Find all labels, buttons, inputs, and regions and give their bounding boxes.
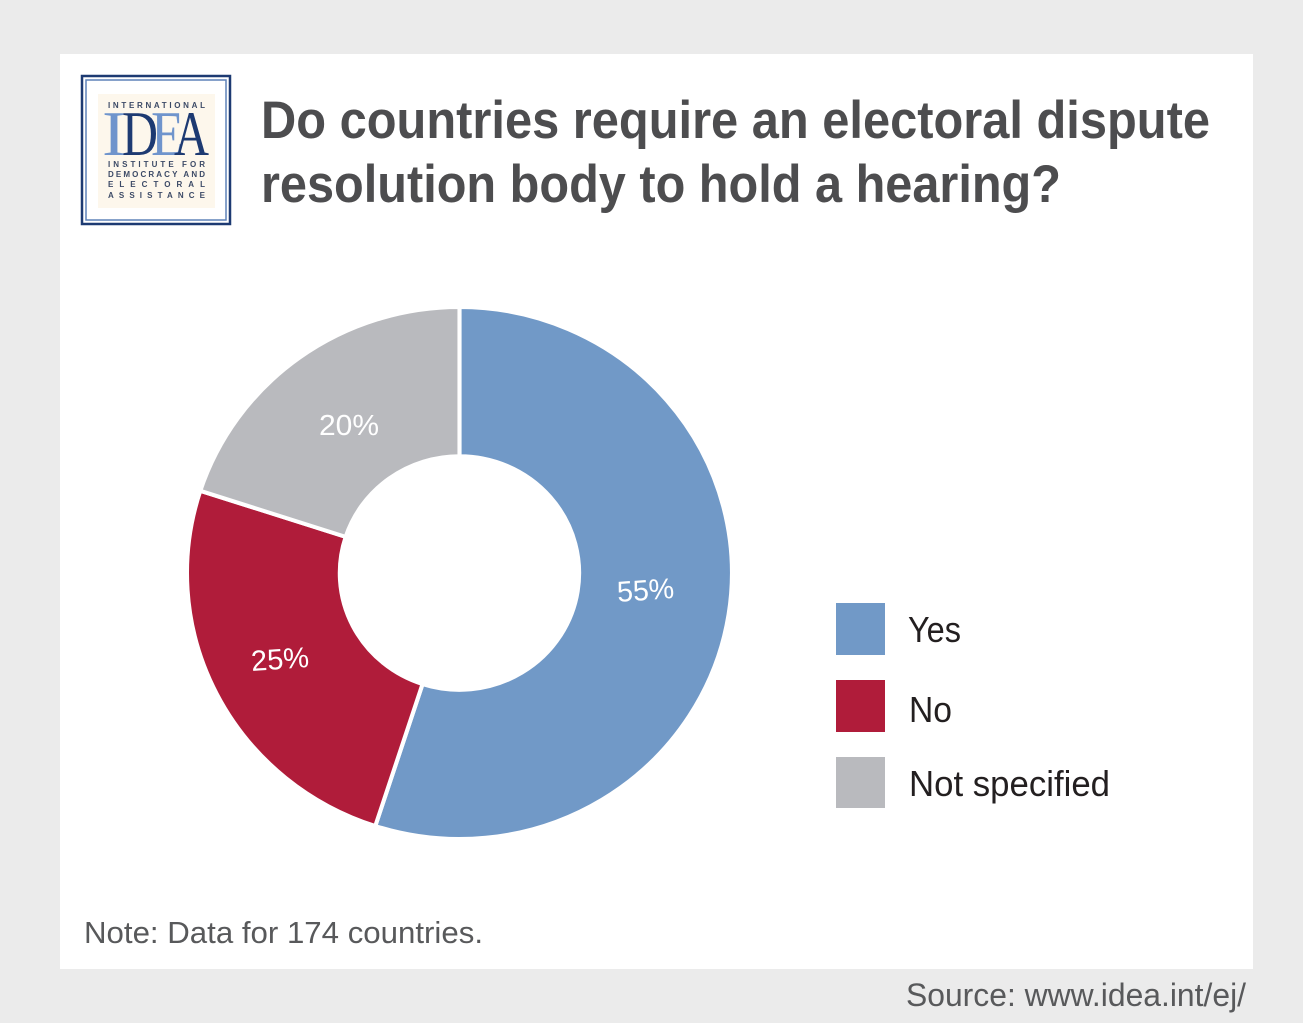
title: Do countries require an electoral dispute bbox=[261, 91, 1210, 150]
note: Note: Data for 174 countries. bbox=[84, 915, 483, 950]
label: 55%: 55% bbox=[616, 573, 675, 609]
icon: International IDEA logo: E bbox=[151, 98, 184, 169]
icon: International IDEA logo: ELECTORAL bbox=[108, 180, 205, 189]
icon: International IDEA logo: D bbox=[122, 98, 158, 169]
segment: No 25% bbox=[187, 491, 423, 826]
source: Source: www.idea.int/ej/ bbox=[906, 977, 1246, 1013]
donut chart bbox=[187, 307, 732, 839]
icon: International IDEA logo: INTERNATIONAL bbox=[108, 101, 205, 110]
segment: Not specified 20% bbox=[200, 307, 459, 537]
title bbox=[261, 91, 1210, 214]
legend item: Not specified bbox=[836, 757, 1110, 808]
icon: International IDEA logo: DEMOCRACY AND bbox=[108, 170, 205, 179]
icon: International IDEA logo: INSTITUTE FOR bbox=[108, 160, 205, 169]
label: 25%: 25% bbox=[250, 642, 310, 678]
legend bbox=[836, 603, 1110, 808]
legend item: No bbox=[836, 680, 952, 732]
icon: International IDEA logo: ASSISTANCE bbox=[108, 191, 206, 200]
segment: Yes 55% bbox=[375, 307, 732, 839]
legend item: No: No bbox=[909, 689, 952, 730]
icon: International IDEA logo: I bbox=[102, 98, 126, 169]
icon: International IDEA logo: A bbox=[174, 98, 209, 169]
legend item: Yes: Yes bbox=[908, 609, 961, 650]
legend item: Not specified: Not specified bbox=[909, 763, 1110, 804]
legend item: Yes bbox=[836, 603, 961, 655]
title: resolution body to hold a hearing? bbox=[261, 155, 1061, 214]
label: 20%: 20% bbox=[319, 410, 379, 442]
icon: International IDEA logo bbox=[82, 76, 230, 224]
